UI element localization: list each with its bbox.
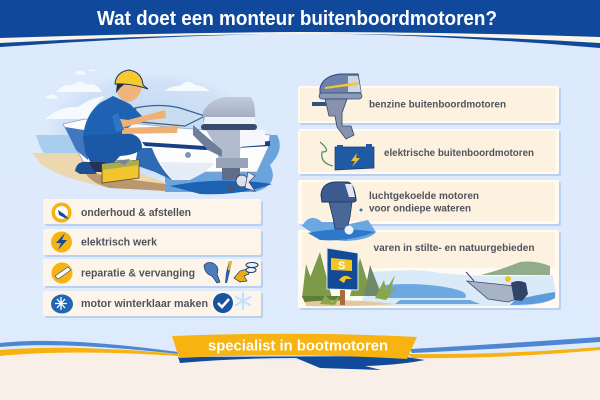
icon: lightning bolt [51,232,72,252]
card: varen in stilte- en natuurgebieden [298,230,561,310]
service: motor winterklaar maken [43,291,263,318]
icon: check badge [213,293,233,313]
card: benzine buitenboordmotoren: benzine buitenboordmotoren [369,98,506,110]
ribbon: specialist in bootmotoren [172,334,425,370]
service: elektrisch werk: elektrisch werk [81,236,158,248]
icon: petrol outboard motor [312,74,362,139]
title: Wat doet een monteur buitenboordmotoren? [97,8,497,30]
icon: repair tools [204,261,258,283]
card: luchtgekoelde motoren: voor ondiepe wateren [369,202,471,214]
ribbon: specialist in bootmotoren: specialist in bootmotoren [208,338,388,354]
service: reparatie & vervanging: reparatie & vervanging [81,268,195,280]
service: onderhoud & afstellen: onderhoud & afstellen [81,207,191,219]
service: elektrisch werk [43,229,263,257]
icon: snowflake outline [235,292,251,310]
card: benzine buitenboordmotoren [298,86,561,125]
service: reparatie & vervanging [43,259,263,288]
card: varen in stilte- en natuurgebieden: varen in stilte- en natuurgebieden [374,242,534,254]
motorboat [466,272,528,302]
toolbox [102,159,139,183]
sky backdrop [45,72,255,184]
icon: wrench [52,262,72,284]
landscape [302,248,556,306]
card: elektrische buitenboordmotoren [298,129,561,176]
icon: air-cooled outboard in splash [302,182,376,241]
icon: wrench gear [52,202,72,222]
illustration: mechanic working on boat with outboard motor [32,70,280,194]
card: luchtgekoelde motoren [298,180,561,226]
bottom waves [0,337,600,400]
card: elektrische buitenboordmotoren: elektrische buitenboordmotoren [384,147,534,159]
header banner [0,0,600,48]
card: luchtgekoelde motoren: luchtgekoelde motoren [369,190,479,202]
service: onderhoud & afstellen [43,199,263,226]
sign: S [338,260,345,272]
sign [327,248,358,305]
outboard motor [193,97,265,192]
dock [32,153,166,191]
water [36,135,95,158]
clouds [45,70,210,119]
icon: snowflake [51,294,73,314]
service: motor winterklaar maken: motor winterklaar maken [81,298,208,310]
icon: battery with cable [320,142,374,170]
boat hull [63,119,270,180]
mechanic [75,70,178,174]
boat windshield [135,106,205,126]
panel: services list [43,199,263,318]
